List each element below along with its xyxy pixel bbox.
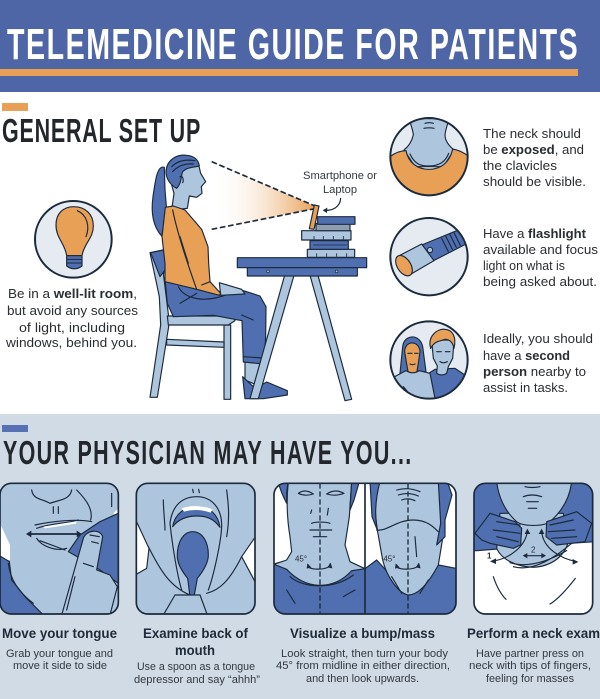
title: TELEMEDICINE GUIDE FOR PATIENTS xyxy=(7,19,578,68)
caption: perform a neck exam: Have partner press on xyxy=(476,648,584,660)
text block: lighting advice: but avoid any sources xyxy=(7,303,138,318)
device: smartphone xyxy=(309,205,319,229)
arrow to device xyxy=(323,198,341,213)
light cone from device xyxy=(212,162,315,229)
text block: neck exposed: be exposed, and xyxy=(483,142,584,157)
text block: lighting advice: of light, including xyxy=(19,320,125,335)
caption: visualize a bump: Look straight, then turn your body xyxy=(281,648,448,660)
text block: second person: have a second xyxy=(483,348,570,363)
illustration: seated patient at table xyxy=(150,155,367,401)
text block: lighting advice xyxy=(5,286,138,350)
device label: Laptop xyxy=(323,184,357,196)
icon: exposed neck xyxy=(389,117,469,196)
caption: examine back of mouth xyxy=(134,625,260,686)
caption: visualize a bump: 45° from midline in either direction, xyxy=(276,660,450,672)
caption: examine back of mouth: Examine back of xyxy=(143,625,248,641)
text block: flashlight: light on what is xyxy=(483,258,565,273)
caption: examine back of mouth: Use a spoon as a tongue xyxy=(137,661,255,673)
caption: examine back of mouth: mouth xyxy=(175,642,215,658)
header banner xyxy=(0,0,600,92)
panel: move your tongue xyxy=(0,483,118,615)
icon: two people xyxy=(385,321,470,403)
section heading: general set up: GENERAL SET UP xyxy=(2,112,200,149)
patient xyxy=(152,155,287,399)
caption: perform a neck exam xyxy=(467,625,600,685)
orange title rule xyxy=(0,69,578,76)
caption: examine back of mouth: depressor and say “ahhh” xyxy=(134,674,260,686)
text block: second person: assist in tasks. xyxy=(483,380,568,395)
text block: lighting advice: Be in a well-lit room, xyxy=(8,286,137,301)
text block: flashlight: being asked about. xyxy=(483,274,597,289)
caption: perform a neck exam: feeling for masses xyxy=(486,673,574,685)
text block: flashlight: available and focus xyxy=(483,242,598,257)
icon: flashlight xyxy=(390,218,468,295)
text block: second person xyxy=(483,331,593,395)
label: step 1: 1 xyxy=(487,552,492,561)
panel: visualize a bump xyxy=(274,482,456,615)
caption: visualize a bump: Visualize a bump/mass xyxy=(290,625,435,641)
text block: neck exposed: The neck should xyxy=(483,126,581,141)
text block: flashlight: Have a flashlight xyxy=(483,226,587,241)
text block: neck exposed: should be visible. xyxy=(483,174,586,189)
stack of books xyxy=(302,217,355,257)
panel: your physician section xyxy=(0,414,600,699)
text block: second person: person nearby to xyxy=(483,364,586,379)
caption: move your tongue: Move your tongue xyxy=(2,625,117,641)
arrow: side to side xyxy=(26,531,82,537)
icon: light bulb xyxy=(35,201,112,278)
label: 45 degrees right: 45° xyxy=(383,555,395,564)
caption: move your tongue xyxy=(2,625,117,672)
device label: Smartphone or xyxy=(303,170,377,182)
panel: perform a neck exam xyxy=(472,482,595,614)
caption: visualize a bump: and then look upwards. xyxy=(306,673,419,685)
device label xyxy=(303,170,377,196)
text block: second person: Ideally, you should xyxy=(483,331,593,346)
chair xyxy=(150,250,235,399)
caption: perform a neck exam: neck with tips of fingers, xyxy=(469,660,591,672)
section heading: your physician may have you: YOUR PHYSICIAN MAY HAVE YOU... xyxy=(3,434,411,471)
table xyxy=(237,258,367,401)
caption: move your tongue: Grab your tongue and xyxy=(6,648,113,660)
label: 45 degrees left: 45° xyxy=(295,555,307,564)
caption: move your tongue: move it side to side xyxy=(13,660,107,672)
text block: neck exposed xyxy=(483,126,586,189)
caption: visualize a bump xyxy=(276,625,450,685)
text block: lighting advice: windows, behind you. xyxy=(5,335,137,350)
text block: flashlight xyxy=(483,226,598,289)
text block: neck exposed: the clavicles xyxy=(483,158,557,173)
label: step 2: 2 xyxy=(531,545,536,554)
panel: examine back of mouth xyxy=(135,483,257,615)
